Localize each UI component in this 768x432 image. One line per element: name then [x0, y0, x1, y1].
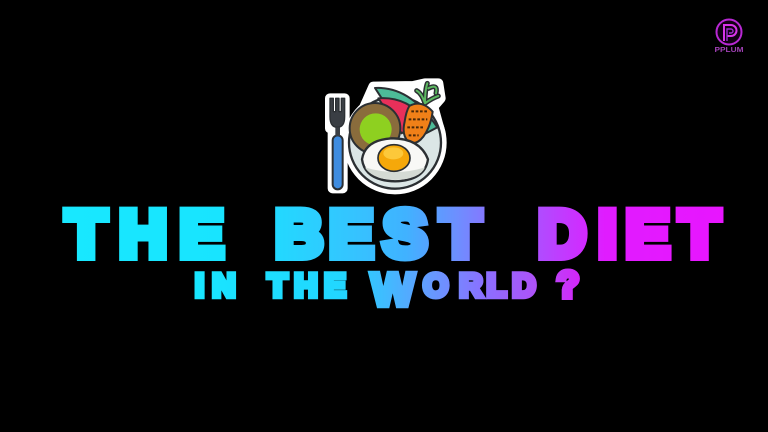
fried egg [362, 138, 428, 181]
subtitle: IN THE WORLD ?: ORLD [423, 267, 536, 303]
title: THE BEST DIET [66, 196, 720, 270]
subtitle: IN THE WORLD ?: IN [195, 267, 236, 303]
fork [330, 98, 345, 189]
icon: plate with fork, egg, carrot and watermelon [330, 83, 442, 189]
plate [349, 97, 441, 189]
logo: PPLUM [714, 20, 744, 54]
subtitle: IN THE WORLD ?: W [371, 264, 415, 316]
title: THE BEST DIET: DIET [538, 196, 720, 270]
carrot [404, 83, 438, 143]
subtitle: IN THE WORLD ?: ? [557, 264, 579, 305]
title: THE BEST DIET: THE [66, 196, 224, 270]
subtitle: IN THE WORLD ?: THE [268, 267, 346, 303]
sticker outline [330, 83, 442, 189]
avocado-green circle [350, 103, 400, 154]
watermelon slice [375, 88, 437, 142]
title: THE BEST DIET: BEST [275, 196, 481, 270]
logo: PPLUM: PPLUM [714, 45, 744, 54]
subtitle: IN THE WORLD ? [195, 264, 579, 316]
